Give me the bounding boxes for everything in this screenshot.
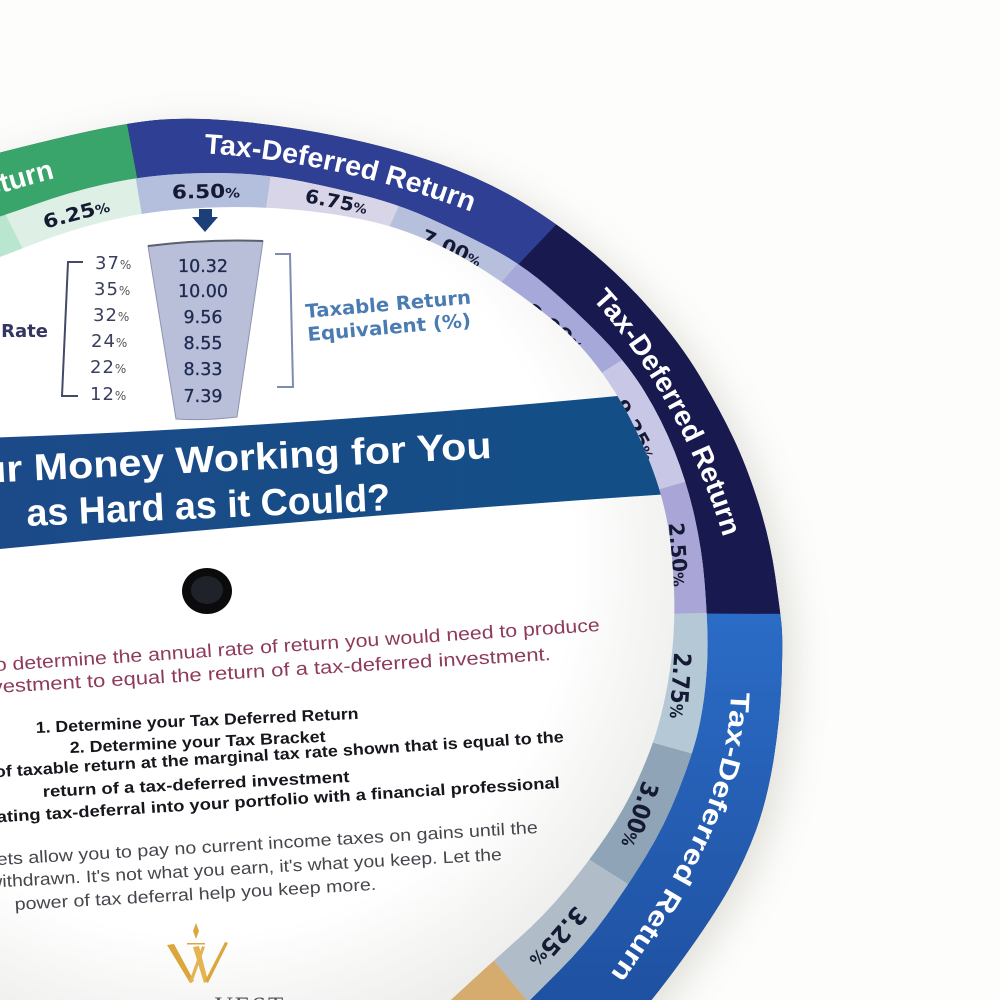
- logo: [167, 923, 285, 1000]
- window values: 10.00: [178, 282, 228, 302]
- closing paragraph: ets allow you to pay no current income taxes on gains until the: [0, 818, 538, 869]
- segment: blue: [530, 614, 782, 1000]
- instructions: return of a tax-deferred investment: [42, 769, 351, 801]
- label 3.25: 3.25%: [524, 901, 592, 974]
- segment: 8.00: [502, 264, 622, 372]
- label 8.00: 8.00%: [521, 299, 588, 357]
- tax rate column: 22%: [90, 357, 127, 378]
- window values: 7.39: [184, 387, 222, 407]
- label: tax-deferred return navy: Tax-Deferred Return: [596, 286, 736, 536]
- tax rate column: 37%: [95, 253, 132, 274]
- segment: 2.50: [660, 482, 707, 614]
- segment: 3.25: [494, 860, 628, 1000]
- window values: 9.56: [184, 308, 222, 328]
- segment: 3.00: [590, 742, 692, 884]
- instructions: 1. Determine your Tax Deferred Return: [35, 706, 359, 737]
- segment: 6.25: [6, 178, 142, 248]
- tax rate column: 24%: [91, 331, 128, 352]
- ring percent labels: [41, 180, 696, 974]
- segment: tan: [451, 960, 526, 1000]
- window values: 10.32: [178, 257, 228, 277]
- segment: 6.50: [136, 173, 270, 214]
- tax rate column: [90, 253, 132, 405]
- infographic: tax deferred return wheel: [0, 110, 812, 1000]
- tax rate column: 32%: [93, 305, 130, 326]
- label: taxable return equivalent: Equivalent (%): [307, 310, 472, 346]
- segment: 2.75: [653, 613, 708, 754]
- label 6.50: 6.50 %: [172, 180, 240, 204]
- closing paragraph: power of tax deferral help you keep more.: [14, 875, 377, 914]
- label 9.25: 9.25%: [610, 396, 661, 464]
- panel: outer colored ring: [0, 118, 782, 1000]
- banner heading: as Hard as it Could?: [26, 477, 391, 535]
- panel: white center disc: [0, 207, 674, 1000]
- segment: indigo: [127, 118, 556, 264]
- label 6.25: 6.25%: [41, 195, 112, 234]
- arrow: selected rate: [192, 209, 218, 232]
- closing paragraph: withdrawn. It's not what you earn, it's what you keep. Let the: [0, 845, 502, 892]
- instructions: [0, 706, 564, 826]
- segment: navy: [518, 224, 780, 614]
- banner heading: [0, 434, 490, 526]
- label: tax-deferred return blue: Tax-Deferred Return: [612, 693, 750, 980]
- segment: green: [0, 124, 138, 216]
- tax rate column: 12%: [90, 384, 127, 405]
- label: rate: Rate: [1, 321, 48, 342]
- segment: 9.25: [602, 360, 686, 489]
- label 6.75: 6.75%: [303, 185, 369, 219]
- bracket: taxable return: [275, 254, 293, 387]
- panel: inner percent ring: [0, 173, 708, 1000]
- result window: [148, 241, 263, 420]
- label: taxable return equivalent: Taxable Return: [305, 287, 472, 323]
- label 2.75: 2.75%: [664, 652, 696, 719]
- label: taxable return equivalent: [305, 287, 472, 346]
- instructions: of taxable return at the marginal tax rate shown that is equal to the: [0, 729, 564, 781]
- instructions: ating tax-deferral into your portfolio with a financial professional: [0, 775, 560, 826]
- segment: 6.75: [266, 176, 399, 226]
- label: tax-deferred return top: Tax-Deferred Return: [206, 134, 474, 212]
- label 3.00: 3.00%: [615, 778, 664, 851]
- tax rate column: 35%: [94, 279, 131, 300]
- closing paragraph: [0, 818, 538, 914]
- label 7.00: 7.00%: [418, 225, 485, 272]
- instructions: 2. Determine your Tax Bracket: [69, 729, 327, 757]
- hole rivet: [182, 568, 232, 614]
- label 2.50: 2.50%: [664, 522, 692, 587]
- disc shadow: [0, 127, 794, 1000]
- segment: 7.00: [390, 206, 518, 282]
- window values: [178, 257, 228, 407]
- intro text: [0, 614, 600, 698]
- window values: 8.33: [184, 360, 222, 380]
- intro text: to determine the annual rate of return you would need to produce: [0, 614, 600, 676]
- bracket: tax rates: [62, 262, 83, 396]
- window values: 8.55: [184, 334, 222, 354]
- banner: [0, 396, 661, 549]
